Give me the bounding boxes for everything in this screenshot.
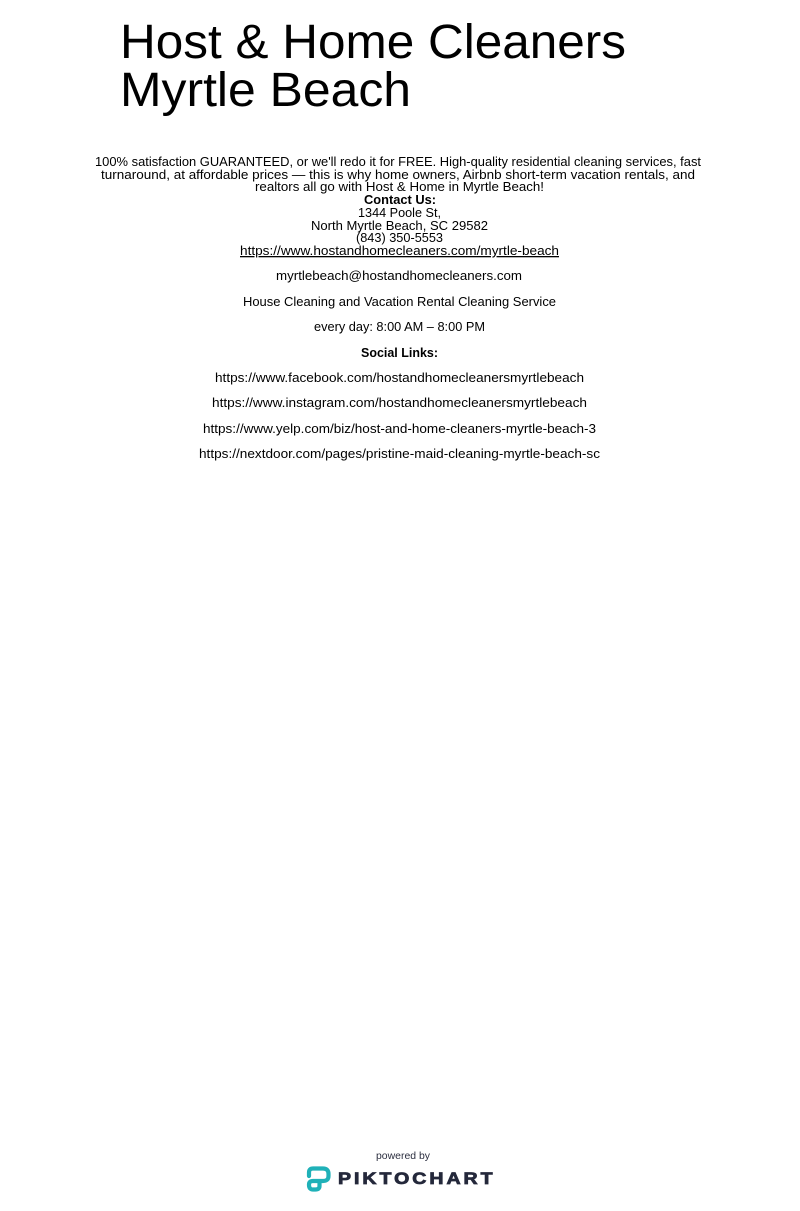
contact details [240, 192, 559, 334]
title [120, 16, 626, 117]
contact details: https://www.hostandhomecleaners.com/myrtle-beach [240, 243, 559, 258]
contact details: every day: 8:00 AM – 8:00 PM [314, 319, 485, 334]
icon: piktochart mark [309, 1168, 328, 1190]
social links: Social Links: [361, 345, 438, 360]
title: Myrtle Beach [120, 64, 411, 117]
contact details: 1344 Poole St, [358, 205, 441, 220]
social links: https://www.instagram.com/hostandhomecleanersmyrtlebeach [212, 395, 587, 410]
contact details: (843) 350-5553 [356, 230, 443, 245]
contact details: House Cleaning and Vacation Rental Cleaning Service [243, 294, 556, 309]
description text block: 100% satisfaction GUARANTEED, or we'll redo it for FREE. High-quality residential cleaning services, fast [95, 154, 701, 169]
social links: https://nextdoor.com/pages/pristine-maid-cleaning-myrtle-beach-sc [199, 446, 601, 461]
contact details: Contact Us: [364, 192, 436, 207]
description text block: turnaround, at affordable prices — this is why home owners, Airbnb short-term vacation rentals, and [101, 167, 695, 182]
piktochart footer logo [309, 1150, 496, 1190]
description text block: realtors all go with Host & Home in Myrtle Beach! [255, 179, 544, 194]
contact details: North Myrtle Beach, SC 29582 [311, 218, 488, 233]
title: Host & Home Cleaners [120, 16, 626, 69]
contact details: myrtlebeach@hostandhomecleaners.com [276, 268, 522, 283]
social links [199, 345, 601, 461]
powered by label: powered by [376, 1150, 431, 1162]
social links: https://www.facebook.com/hostandhomecleanersmyrtlebeach [215, 370, 584, 385]
social links: https://www.yelp.com/biz/host-and-home-cleaners-myrtle-beach-3 [203, 421, 596, 436]
description text block [95, 154, 701, 194]
wordmark: PIKTOCHART [338, 1168, 496, 1188]
